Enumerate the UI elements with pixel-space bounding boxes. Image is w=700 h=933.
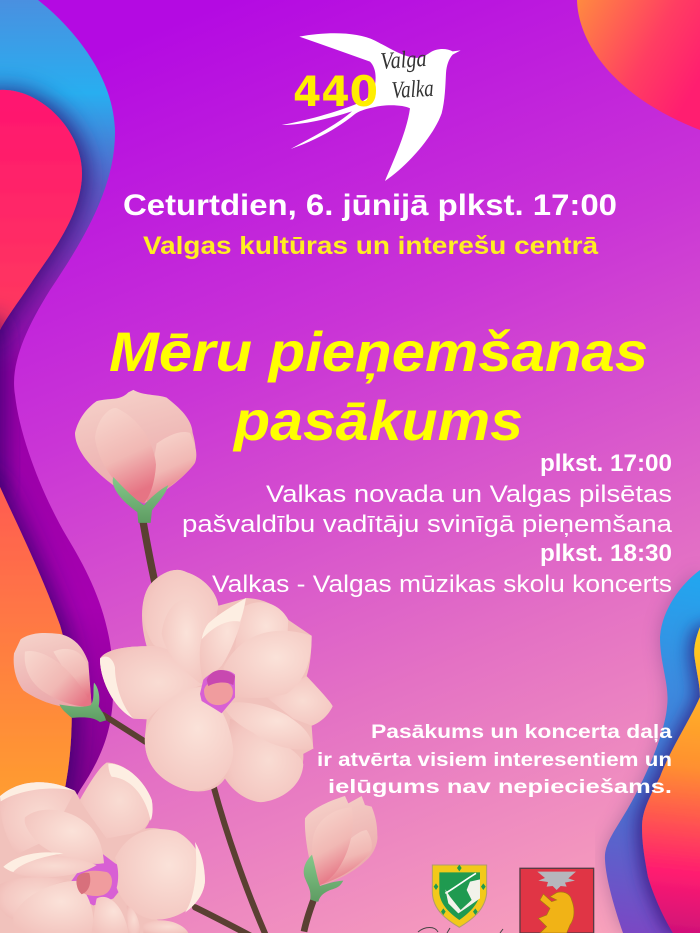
flower: bottom left xyxy=(0,763,205,933)
title xyxy=(109,320,648,452)
note: open to everyone: ir atvērta visiem interesentiem un xyxy=(317,750,672,771)
bud: left xyxy=(14,633,106,722)
note: open to everyone: ielūgums nav nepieciešams. xyxy=(328,777,672,798)
logo: red shield with lion xyxy=(520,868,594,933)
flower: large xyxy=(100,570,333,802)
logo: white dove with 440 xyxy=(282,33,461,181)
logo: green and gold shield xyxy=(432,865,487,927)
number: 440: 440 xyxy=(293,67,378,116)
programme text: Valkas novada un Valgas pilsētas xyxy=(266,481,672,508)
title: pasākums xyxy=(232,389,523,452)
wave: left side xyxy=(0,0,115,796)
bud: lower right xyxy=(304,796,377,932)
illustration: magnolia branch xyxy=(0,390,333,933)
heading: venue: Valgas kultūras un interešu centrā xyxy=(143,232,599,260)
icon: dove xyxy=(282,33,461,181)
title: Mēru pieņemšanas xyxy=(109,320,648,384)
programme text: pašvaldību vadītāju svinīgā pieņemšana xyxy=(182,511,673,538)
wave: bottom right xyxy=(605,570,700,933)
programme text: Valkas - Valgas mūzikas skolu koncerts xyxy=(212,571,672,598)
heading: date and time: Ceturtdien, 6. jūnijā plkst. 17:00 xyxy=(123,189,617,222)
stems xyxy=(103,519,267,933)
note: open to everyone: Pasākums un koncerta daļa xyxy=(371,722,673,743)
bud: top xyxy=(75,390,196,523)
programme text: plkst. 17:00 xyxy=(540,450,672,477)
wave: top right corner xyxy=(577,0,700,130)
programme text xyxy=(182,450,673,598)
script: Valga: Valga xyxy=(380,46,427,75)
script: Valka: Valka xyxy=(391,76,434,104)
note: open to everyone xyxy=(317,722,673,798)
programme text: plkst. 18:30 xyxy=(540,540,672,567)
